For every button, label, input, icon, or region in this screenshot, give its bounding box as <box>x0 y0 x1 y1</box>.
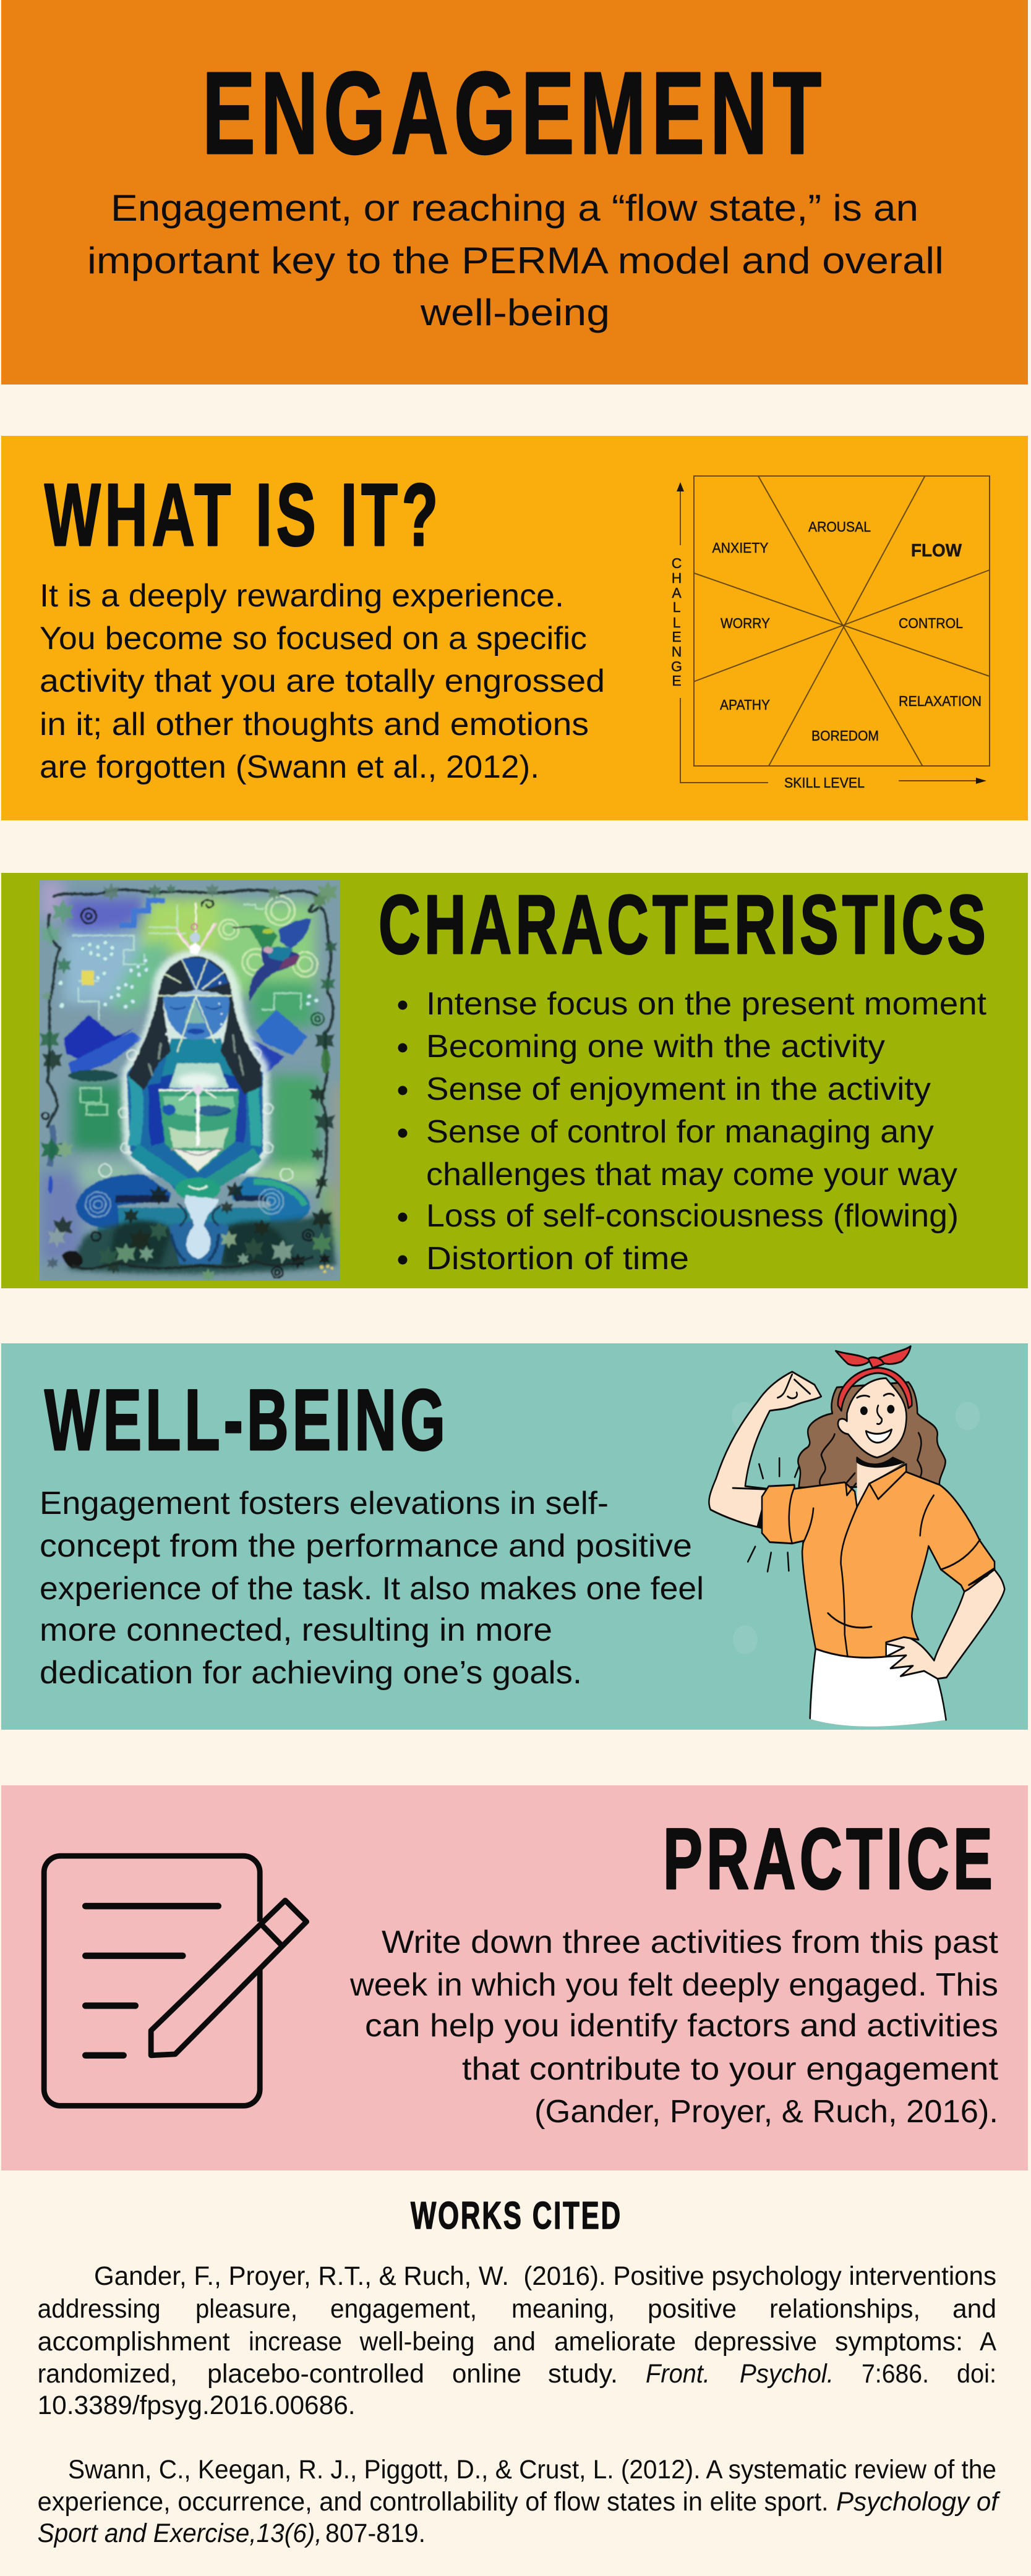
chart: flow model diagram: A <box>672 585 682 601</box>
citation: Gander et al.: well-being <box>359 2327 475 2357</box>
chart: flow model diagram: E <box>672 629 682 645</box>
citation: Swann et al.: experience, occurrence, and controllability of flow states in elite sport. <box>38 2487 829 2517</box>
works cited <box>38 2195 1001 2548</box>
bullet list: characteristics <box>398 986 987 1277</box>
citation: Gander et al.: meaning, <box>511 2294 615 2324</box>
chart: flow model diagram: ANXIETY <box>712 540 768 556</box>
hummingbird <box>233 919 311 1001</box>
chart: flow model diagram: L <box>673 614 681 631</box>
text block: well-being: dedication for achieving one’s goals. <box>40 1655 582 1691</box>
citation: Swann et al.: Swann, C., Keegan, R. J., Piggott, D., & Crust, L. (2012). A systematic review of the <box>68 2455 996 2485</box>
panel: title banner <box>1 0 1028 385</box>
citation: Gander et al.: Front. <box>646 2359 710 2389</box>
bullet list: characteristics: Distortion of time <box>426 1241 689 1277</box>
illustration: woman flexing arm <box>709 1346 1004 1727</box>
soft colour fields <box>39 880 342 1282</box>
citation: Gander et al.: depressive <box>694 2327 817 2357</box>
chart: flow model diagram: L <box>673 599 681 615</box>
text block: definition: activity that you are totally engrossed <box>40 663 605 699</box>
citation: Gander et al.: increase <box>249 2327 342 2357</box>
citation: Gander et al.: 10.3389/fpsyg.2016.00686. <box>38 2391 356 2420</box>
chart: flow model diagram: FLOW <box>911 541 962 561</box>
panel: practice <box>1 1785 1028 2170</box>
chart: flow model diagram <box>671 476 990 791</box>
text block: well-being: more connected, resulting in more <box>40 1612 552 1648</box>
bullet list: characteristics: Sense of control for managing any <box>426 1114 934 1150</box>
chart: flow model diagram: E <box>672 673 682 689</box>
citation: Gander et al.: study. <box>548 2359 618 2389</box>
citation: Swann et al.: 807-819. <box>325 2519 426 2548</box>
citation: Gander et al.: addressing <box>38 2294 161 2324</box>
citation: Gander et al.: online <box>452 2359 521 2389</box>
chart: flow model diagram: WORRY <box>721 615 770 631</box>
chart: flow model diagram: SKILL LEVEL <box>784 775 865 791</box>
chart: flow model diagram: APATHY <box>720 697 770 713</box>
text block: practice: that contribute to your engagement <box>462 2051 999 2087</box>
citation: Gander et al.: randomized, <box>38 2359 178 2389</box>
icon: notepad and pencil <box>44 1856 307 2106</box>
text block: practice <box>349 1924 999 2130</box>
panel: characteristics <box>1 873 1028 1288</box>
bullet list: characteristics: Loss of self-consciousness (flowing) <box>426 1198 959 1234</box>
subtitle <box>87 187 944 333</box>
text block: definition: It is a deeply rewarding experience. <box>40 578 564 614</box>
citation: Gander et al.: and <box>952 2294 996 2324</box>
text block: practice: (Gander, Proyer, & Ruch, 2016). <box>534 2094 998 2130</box>
citation: Gander et al.: doi: <box>957 2359 996 2389</box>
bullet list: characteristics: Becoming one with the activity <box>426 1029 885 1065</box>
legs <box>88 1207 289 1232</box>
upper steps <box>119 901 165 925</box>
chart: flow model diagram: RELAXATION <box>899 693 982 709</box>
chart: flow model diagram: H <box>672 570 682 586</box>
text block: well-being <box>40 1486 704 1691</box>
text block: well-being: Engagement fosters elevations in self- <box>40 1486 609 1521</box>
bullet list: characteristics: Sense of enjoyment in the activity <box>426 1071 931 1107</box>
text block: practice: can help you identify factors and activities <box>365 2008 998 2044</box>
chart: flow model diagram: C <box>672 555 682 571</box>
citation: Gander et al.: relationships, <box>769 2294 920 2324</box>
chart: flow model diagram: N <box>672 644 682 660</box>
citation: Gander et al.: A <box>980 2327 996 2357</box>
halo <box>122 950 269 1175</box>
body <box>127 1053 263 1197</box>
hair <box>159 956 232 995</box>
chart: flow model diagram: AROUSAL <box>808 519 871 535</box>
subtitle: Engagement, or reaching a “flow state,” is an <box>111 187 918 229</box>
citation: Gander et al.: placebo-controlled <box>207 2359 424 2389</box>
bullet list: characteristics: Intense focus on the present moment <box>426 986 987 1022</box>
heading: works cited: WORKS CITED <box>411 2195 622 2237</box>
neck and chest <box>162 1037 234 1077</box>
text block: definition: in it; all other thoughts and emotions <box>40 707 589 742</box>
dots <box>58 940 319 1009</box>
text block: definition: are forgotten (Swann et al., 2012). <box>40 749 539 785</box>
image: meditating figure painting <box>37 878 346 1286</box>
text block: definition <box>40 578 605 785</box>
citation: Swann et al. <box>38 2455 1001 2548</box>
subtitle: well-being <box>420 292 610 333</box>
heading: what is it: WHAT IS IT? <box>45 466 442 564</box>
chart: flow model diagram: G <box>671 658 682 674</box>
spirals <box>42 900 314 1278</box>
ivy leaves <box>39 881 338 1283</box>
bullet list: characteristics: challenges that may come your way <box>426 1157 957 1192</box>
text block: practice: week in which you felt deeply engaged. This <box>349 1967 998 2003</box>
citation: Gander et al.: Gander, F., Proyer, R.T., & Ruch, W. (2016). Positive psychology interventions <box>94 2261 996 2291</box>
hands <box>134 1150 194 1191</box>
citation: Swann et al.: Sport and Exercise,13(6), <box>38 2519 322 2548</box>
heading: well-being: WELL-BEING <box>45 1371 449 1468</box>
citation: Gander et al.: and <box>493 2327 536 2357</box>
citation: Swann et al.: Psychology of <box>836 2487 1001 2517</box>
text block: well-being: experience of the task. It also makes one feel <box>40 1571 704 1607</box>
swirls behind bird <box>219 896 317 977</box>
citation: Gander et al.: positive <box>648 2294 737 2324</box>
citation: Gander et al.: accomplishment <box>38 2327 230 2357</box>
vines <box>48 890 333 1197</box>
mountains <box>64 1015 134 1061</box>
roots and glow <box>169 1222 229 1264</box>
panel: what is it <box>1 436 1028 820</box>
citation: Gander et al.: 7:686. <box>862 2359 929 2389</box>
text block: practice: Write down three activities from this past <box>382 1924 999 1960</box>
citation: Gander et al.: Psychol. <box>740 2359 834 2389</box>
citation: Gander et al.: symptoms: <box>835 2327 963 2357</box>
citation: Gander et al.: ameliorate <box>554 2327 676 2357</box>
chart: flow model diagram: CONTROL <box>899 615 963 631</box>
citation: Gander et al.: engagement, <box>330 2294 477 2324</box>
chart: flow model diagram: BOREDOM <box>811 728 879 744</box>
citation: Gander et al.: pleasure, <box>195 2294 297 2324</box>
crown <box>178 903 215 955</box>
text block: definition: You become so focused on a specific <box>40 621 587 657</box>
citation: Gander et al. <box>38 2261 996 2420</box>
text block: well-being: concept from the performance and positive <box>40 1528 692 1564</box>
panel: well-being <box>1 1343 1028 1730</box>
subtitle: important key to the PERMA model and overall <box>87 240 944 281</box>
foliage mass <box>68 1212 336 1273</box>
